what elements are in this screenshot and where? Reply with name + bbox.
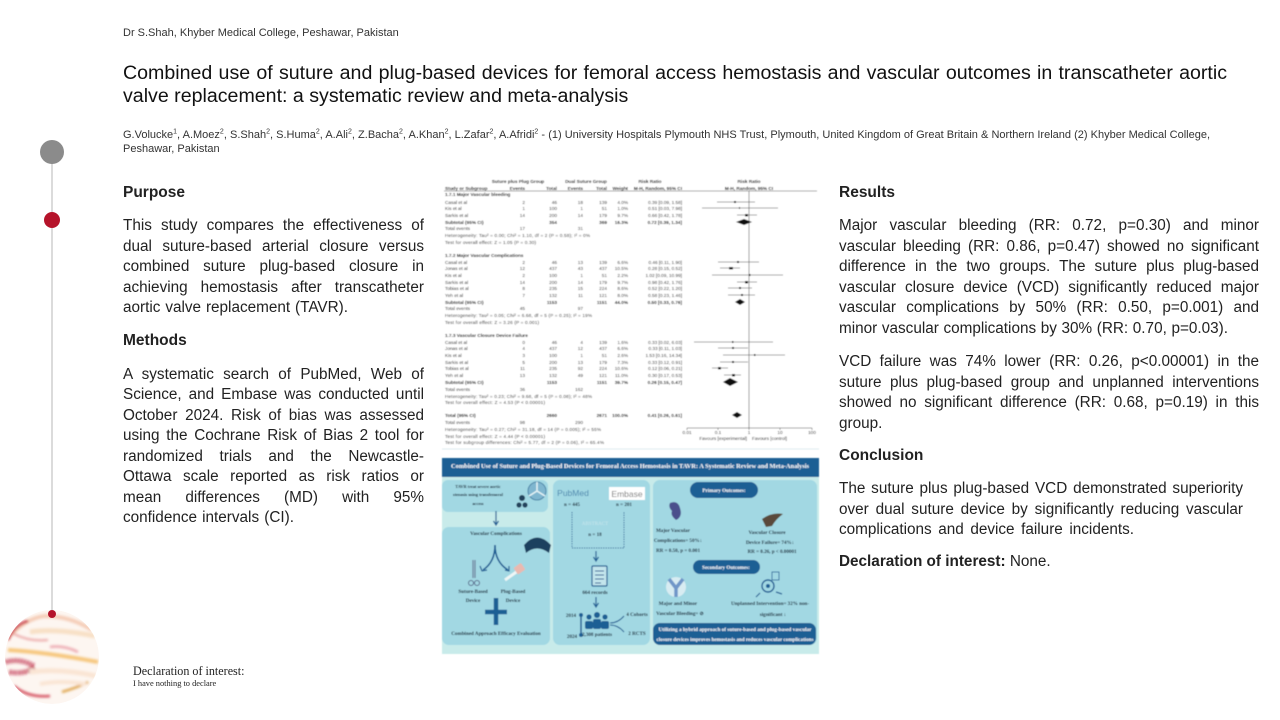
forest plot: 43 [578,266,583,271]
forest plot: 8.0% [617,293,628,298]
forest plot: 132 [549,373,557,378]
forest plot: Favours [control] [752,436,787,441]
forest plot: 224 [599,286,607,291]
forest plot: 13 [578,260,583,265]
icon: watercolor planet [5,610,99,704]
forest plot: Test for overall effect: Z = 4.53 (P < 0.00001) [445,400,545,405]
forest plot: 14 [520,213,525,218]
panel: search and records: 664 records [582,590,608,596]
forest plot: Suture plus Plug Group [492,179,544,184]
heading: purpose: Purpose [123,184,185,200]
panel: outcomes [653,480,817,645]
text block: purpose: combined suture plug-based closure in [123,258,424,274]
panel: outcomes: Major Vascular [656,528,691,534]
panel: outcomes: closure devices improves hemostasis and reduces vascular complications [656,637,814,643]
text block: results first paragraph: minor vascular complications by 30% (RR: 0.70, p=0.03). [839,320,1228,336]
panel: outcomes: significant ↓ [760,612,786,618]
forest plot: 13 [520,373,525,378]
text block: methods: confidence intervals (CI). [123,508,294,526]
forest plot: 437 [549,346,557,351]
text block: results second paragraph: suture plus plug-based group and unplanned interventions [839,374,1259,390]
forest plot: 4 [580,340,583,345]
forest plot: 9.7% [617,213,628,218]
panel: search and records: 2024 [567,634,578,640]
forest plot: 2671 [597,413,607,418]
text block: purpose: dual suture-based arterial closure versus [123,238,424,254]
forest plot: 437 [599,266,607,271]
text block: conclusion: over dual suture device by significantly reducing vascular [839,500,1243,518]
forest plot: 2.6% [617,353,628,358]
forest plot: 0.72 [0.39, 1.34] [648,220,682,225]
text block: results second paragraph: group. [839,414,882,432]
forest plot: Total events [445,306,471,311]
text block: methods [123,366,424,526]
panel: TAVR background [442,480,548,512]
forest plot: Heterogeneity: Tau² = 0.05; Chi² = 6.68, df = 5 (P = 0.25); I² = 19% [445,313,592,318]
text block: purpose [123,216,424,316]
panel: outcomes: Utilizing a hybrid approach of suture-based and plug-based vascular [658,627,812,633]
forest plot: 8 [522,286,525,291]
title: valve replacement: a systematic review and meta-analysis [123,85,628,107]
forest plot: 2660 [547,413,557,418]
panel: vascular complications: Device [466,598,481,604]
forest plot: Total events [445,387,471,392]
forest plot: 0.33 [0.02, 6.03] [648,340,682,345]
forest plot: 98 [520,420,525,425]
forest plot: 31 [578,226,583,231]
forest plot: 0.12 [0.06, 0.21] [648,366,682,371]
graphical abstract header band [442,458,819,477]
panel: vascular complications: Plug-Based [501,589,525,595]
forest plot: 4 [522,346,525,351]
text block: results first paragraph: vascular bleeding (RR: 0.86, p=0.47) showed no significant [839,238,1259,254]
forest plot: 100 [549,206,557,211]
forest plot: Casal et al [445,260,467,265]
text block: purpose: aortic valve replacement (TAVR). [123,298,348,316]
forest plot: 1 [580,353,583,358]
panel: search and records: 2 RCTS [628,631,646,637]
forest plot: Subtotal (95% CI) [445,220,484,225]
forest plot: Risk Ratio [639,179,662,184]
forest plot: 121 [599,373,607,378]
panel: methods [123,332,424,526]
forest plot: Heterogeneity: Tau² = 0.27; Chi² = 31.18, df = 14 (P = 0.005); I² = 55% [445,427,601,432]
forest plot: M-H, Random, 95% CI [725,186,773,191]
panel: search and records: PubMed [557,488,589,498]
forest plot: 290 [575,420,583,425]
forest plot: Heterogeneity: Tau² = 0.00; Chi² = 1.10, df = 2 (P = 0.58); I² = 0% [445,233,590,238]
forest plot: 0.52 [0.22, 1.20] [648,286,682,291]
forest plot: 51 [602,353,607,358]
forest plot: Total (95% CI) [445,413,476,418]
forest plot: 5 [522,360,525,365]
forest plot: 0.39 [0.09, 1.58] [648,200,682,205]
forest plot: Favours [experimental] [699,436,747,441]
declaration of interest statement: Declaration of interest: None. [839,553,1051,570]
forest plot: Test for overall effect: Z = 3.26 (P = 0.001) [445,320,539,325]
forest plot: 235 [549,286,557,291]
forest plot: 0.41 [0.26, 0.61] [648,413,682,418]
forest plot: 46 [552,200,557,205]
forest plot: 1 [580,206,583,211]
forest plot: 1.7.3 Vascular Closure Device Failure [445,333,528,338]
forest plot: 200 [549,213,557,218]
panel: search and records [553,480,650,645]
forest plot: 1.02 [0.09, 10.99] [646,273,682,278]
text block: methods: randomized trials and the Newcastle- [123,448,424,464]
forest plot: Subtotal (95% CI) [445,300,484,305]
forest plot: Yeh et al [445,373,463,378]
forest plot: Events [510,186,525,191]
panel: vascular complications: Device [506,598,521,604]
forest plot: Test for overall effect: Z = 1.05 (P = 0.30) [445,240,536,245]
forest plot: 0.58 [0.23, 1.46] [648,293,682,298]
forest plot: 139 [599,260,607,265]
panel: vascular complications: Combined Approach Efficacy Evaluation [451,631,541,637]
forest plot: 369 [599,220,607,225]
forest plot: Total events [445,226,471,231]
forest plot: Events [568,186,583,191]
forest plot: Test for subgroup differences: Chi² = 5.77, df = 2 (P = 0.06), I² = 65.4% [445,440,604,445]
forest plot: 3 [522,353,525,358]
forest plot: 0.46 [0.11, 1.90] [648,260,682,265]
panel: vascular complications: Vascular Complications [470,531,522,537]
graphical abstract header band: Combined Use of Suture and Plug-Based Devices for Femoral Access Hemostasis in TAVR: A Systematic Review and Meta-Analysis [451,463,810,470]
forest plot: 1.6% [617,340,628,345]
forest plot: 0.30 [0.17, 0.53] [648,373,682,378]
forest plot: Test for overall effect: Z = 4.44 (P < 0.00001) [445,434,545,439]
forest plot: 235 [549,366,557,371]
forest plot: 1.53 [0.16, 14.34] [646,353,682,358]
panel: search and records: 4 Cohorts [626,612,648,618]
forest plot: Weight [612,186,628,191]
forest plot: Heterogeneity: Tau² = 0.23; Chi² = 9.68, df = 5 (P = 0.08); I² = 48% [445,394,592,399]
forest plot: 200 [549,360,557,365]
text block: results first paragraph: vascular closure device (VCD) significantly reduced major [839,278,1259,296]
forest plot: 179 [599,280,607,285]
forest plot: 18 [578,200,583,205]
forest plot: 0.33 [0.12, 0.91] [648,360,682,365]
forest plot: 14 [578,213,583,218]
panel: outcomes: RR = 0.26, p < 0.00001 [747,549,797,555]
forest plot: 100 [549,273,557,278]
forest plot: 0.33 [0.11, 1.03] [648,346,682,351]
panel: conclusion [839,446,1243,538]
forest plot: 10 [777,430,783,435]
forest plot: 2 [522,260,525,265]
forest plot: 2 [522,273,525,278]
forest plot: Casal et al [445,200,467,205]
forest plot: 1.0% [617,206,628,211]
forest plot: Tobias et al [445,366,469,371]
forest plot: 1.7.2 Major Vascular Complications [445,253,524,258]
authors and affiliations: G.Volucke1, A.Moez2, S.Shah2, S.Huma2, A.Ali2, Z.Bacha2, A.Khan2, L.Zafar2, A.Afridi2 - (1) University Hospitals Plymouth NHS Trust, Plymouth, United Kingdom of Great Britain & Northern Ireland (2) Khyber Medical College, [123,128,1210,141]
forest plot: 1.7.1 Major Vascular bleeding [445,192,511,197]
panel: outcomes: Primary Outcomes: [702,488,746,494]
text block: conclusion [839,480,1243,538]
forest plot: Casal et al [445,340,467,345]
forest plot: 7 [522,293,525,298]
forest plot: 2 [522,200,525,205]
panel: purpose [123,184,424,316]
forest plot: 51 [602,273,607,278]
forest plot: 437 [549,266,557,271]
panel: search and records: 2014 [566,613,577,619]
declaration of interest footnote [133,664,244,688]
forest plot: 354 [549,220,557,225]
text block: results second paragraph: VCD failure was 74% lower (RR: 0.26, p<0.00001) in the [839,352,1259,370]
text block: methods: A systematic search of PubMed, Web of [123,366,424,382]
heading: results: Results [839,184,895,200]
forest plot: 179 [599,213,607,218]
panel: outcomes: Secondary Outcomes: [702,565,750,571]
forest plot: 100 [549,353,557,358]
forest plot: Kis et al [445,353,462,358]
forest plot: 8.6% [617,286,628,291]
forest plot: 0.28 [0.15, 0.52] [648,266,682,271]
panel: outcomes: Major and Minor [659,601,698,607]
forest plot: 1 [522,206,525,211]
forest plot: 11.0% [615,373,628,378]
forest plot: 0.1 [715,430,722,435]
declaration of interest footnote: I have nothing to declare [133,679,216,688]
forest plot: 16.3% [615,220,629,225]
forest plot: 0.26 [0.15, 0.47] [648,380,682,385]
forest plot: 100.0% [612,413,629,418]
forest plot: 1 [748,430,751,435]
panel: TAVR background: access [472,501,484,506]
forest plot: 51 [602,206,607,211]
forest plot: Dual Suture Group [565,179,607,184]
panel: outcomes: RR = 0.50, p = 0.001 [656,548,700,554]
forest plot: 132 [549,293,557,298]
forest plot: 49 [578,373,583,378]
text block: purpose: achieving hemostasis after transcatheter [123,278,424,296]
forest plot: Kis et al [445,273,462,278]
forest plot: 46 [552,340,557,345]
forest plot: 6.6% [617,260,628,265]
forest plot: 11 [578,293,583,298]
forest plot: 0.50 [0.33, 0.76] [648,300,682,305]
forest plot: Tobias et al [445,286,469,291]
forest plot: Sarkis et al [445,280,468,285]
forest plot: Study or Subgroup [445,186,488,191]
forest plot: 14 [520,280,525,285]
panel: outcomes: Vascular Bleeding= ⊘ [656,611,704,617]
forest plot: 139 [599,200,607,205]
text block: results first paragraph: Major vascular bleeding (RR: 0.72, p=0.30) and minor [839,216,1259,234]
forest plot: 2.2% [617,273,628,278]
panel: search and records: n = 201 [616,502,632,508]
panel: outcomes: Unplanned Intervention= 32% non- [731,601,809,607]
forest plot: 9.7% [617,280,628,285]
text block: methods: October 2024. Risk of bias was assessed [123,406,424,424]
forest plot: Sarkis et al [445,213,468,218]
text block: results first paragraph: vascular complications by 50% (RR: 0.50, p=0.001) and [839,298,1259,316]
forest plot: Jonas et al [445,346,468,351]
forest plot: Jonas et al [445,266,468,271]
forest plot: 1153 [547,380,557,385]
text block: methods: Science, and Embase was conducted until [123,386,424,402]
text block: results second paragraph [839,352,1259,432]
authors and affiliations [123,128,1210,155]
text block: conclusion: The suture plus plug-based VCD demonstrated superiority [839,480,1243,496]
text block: methods: mean differences (MD) with 95% [123,488,424,506]
forest plot: 6.6% [617,346,628,351]
panel: search and records: Embase [611,489,643,499]
forest plot: Sarkis et al [445,360,468,365]
forest plot: 36 [520,387,525,392]
panel: TAVR background: stenosis using transfemoral [453,492,504,497]
panel: outcomes: Complications= 50%↓ [654,538,702,544]
forest plot: 437 [599,346,607,351]
forest plot: 1151 [597,380,607,385]
forest plot: 10.5% [615,266,628,271]
forest plot: 44.0% [615,300,629,305]
forest plot: Subtotal (95% CI) [445,380,484,385]
forest plot: Total events [445,420,471,425]
forest plot: 1151 [597,300,607,305]
forest plot: 15 [578,286,583,291]
panel: vascular complications [442,527,551,645]
forest plot: 11 [520,366,525,371]
forest plot: 10.6% [615,366,628,371]
forest plot: 0.66 [0.42, 1.78] [648,213,682,218]
forest plot: 12 [520,266,525,271]
forest plot: 162 [575,387,583,392]
forest plot: Yeh et al [445,293,463,298]
panel: search and records: n = 18 [588,532,602,538]
declaration of interest footnote: Declaration of interest: [133,664,244,678]
authors and affiliations: Peshawar, Pakistan [123,143,220,155]
panel: TAVR background: TAVR treat severe aortic [455,484,501,489]
panel: vascular complications: Suture-Based [458,589,488,595]
panel: outcomes: Device Failure= 74%↓ [746,540,794,546]
panel: outcomes: Vascular Closure [748,530,786,536]
forest plot: 4.0% [617,200,628,205]
panel: search and records: n = 445 [564,502,580,508]
arrow: TAVR to complications [494,511,498,525]
forest plot: 46 [552,260,557,265]
forest plot: 100 [808,430,816,435]
forest plot: 0.51 [0.03, 7.98] [648,206,682,211]
title [123,62,1227,107]
text block: results second paragraph: showed no significant difference (RR: 0.68, p=0.19) in this [839,394,1259,410]
forest plot: M-H, Random, 95% CI [634,186,682,191]
panel: search and records: ABSTRACT [582,521,609,527]
forest plot: 1153 [547,300,557,305]
text block: conclusion: complications and device failure incidents. [839,520,1134,538]
panel: results [839,184,1259,432]
text block: purpose: This study compares the effectiveness of [123,216,424,234]
forest plot: 179 [599,360,607,365]
forest plot: 17 [520,226,525,231]
text block: results first paragraph: difference in the two groups. The suture plus plug-based [839,258,1259,274]
forest plot: 200 [549,280,557,285]
heading: conclusion: Conclusion [839,446,923,464]
forest plot: Kis et al [445,206,462,211]
forest plot: 0.98 [0.42, 1.76] [648,280,682,285]
forest plot: 139 [599,340,607,345]
panel: search and records: 2,308 patients [582,632,612,638]
forest plot: 39.7% [615,380,629,385]
forest plot: 0.01 [682,430,692,435]
forest plot: 121 [599,293,607,298]
forest plot: 14 [578,280,583,285]
forest plot: Total [596,186,607,191]
forest plot: 224 [599,366,607,371]
forest plot: 12 [578,346,583,351]
title: Combined use of suture and plug-based devices for femoral access hemostasis and vascular outcomes in transcatheter aortic [123,62,1227,84]
forest plot: 7.3% [617,360,628,365]
forest plot: 0 [522,340,525,345]
presenter affiliation: Dr S.Shah, Khyber Medical College, Peshawar, Pakistan [123,27,399,39]
forest plot: 92 [578,366,583,371]
forest plot: Risk Ratio [738,179,761,184]
forest plot: 97 [578,306,583,311]
text block: methods: using the Cochrane Risk of Bias 2 tool for [123,426,424,444]
forest plot: 45 [520,306,525,311]
text block: results first paragraph [839,216,1259,336]
forest plot: Total [546,186,557,191]
heading: methods: Methods [123,332,187,348]
forest plot: 1 [580,273,583,278]
forest plot: 13 [578,360,583,365]
text block: methods: Ottawa scale reported as risk ratios or [123,468,424,484]
